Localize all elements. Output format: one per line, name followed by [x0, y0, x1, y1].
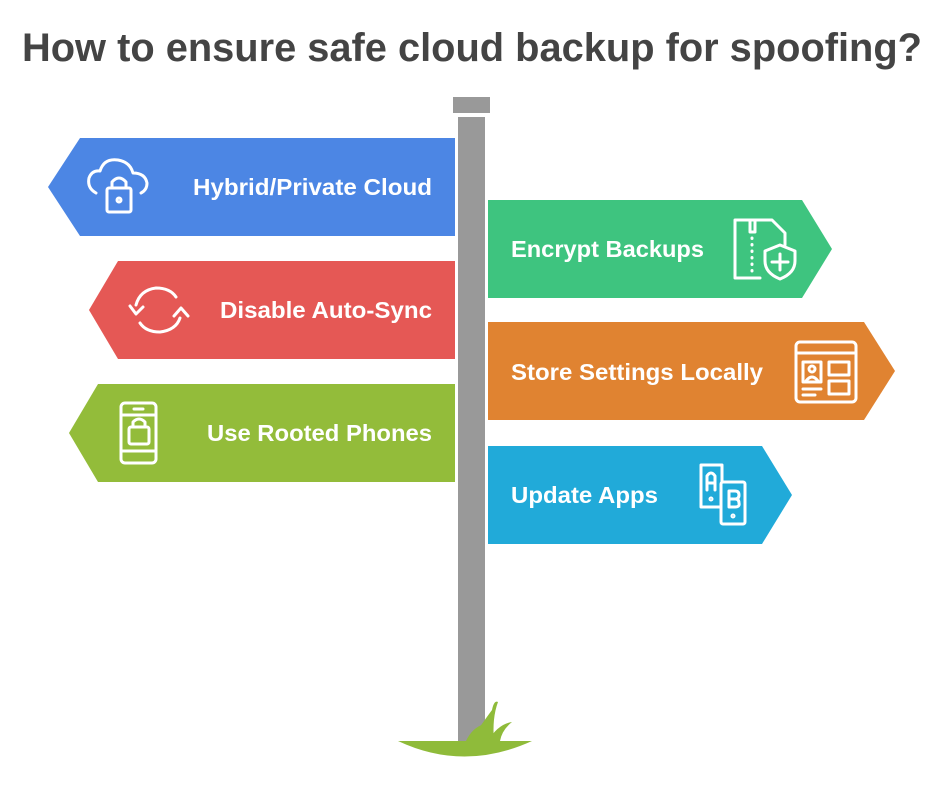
sign: Encrypt Backups [488, 200, 832, 298]
grass [398, 702, 532, 756]
sign: Disable Auto-Sync [89, 261, 455, 359]
sign: Store Settings Locally [488, 322, 895, 420]
sign: Update Apps: Update Apps [511, 482, 658, 508]
title: How to ensure safe cloud backup for spoofing? [22, 26, 922, 70]
icon: sync arrows [130, 288, 188, 332]
icon: A/B phones [701, 465, 745, 524]
icon: zip file shield [735, 220, 795, 279]
icon: phone lock [121, 403, 156, 463]
icon: cloud lock [89, 160, 147, 212]
sign: Update Apps [488, 446, 792, 544]
sign: Disable Auto-Sync: Disable Auto-Sync [220, 297, 432, 323]
pole [453, 97, 490, 742]
sign: Use Rooted Phones [69, 384, 455, 482]
sign: Hybrid/Private Cloud [48, 138, 455, 236]
sign: Use Rooted Phones: Use Rooted Phones [207, 420, 432, 446]
sign: Store Settings Locally: Store Settings Locally [511, 359, 763, 385]
icon: browser profile [796, 342, 856, 402]
sign: Encrypt Backups: Encrypt Backups [511, 236, 704, 262]
sign: Hybrid/Private Cloud: Hybrid/Private Cloud [193, 174, 432, 200]
